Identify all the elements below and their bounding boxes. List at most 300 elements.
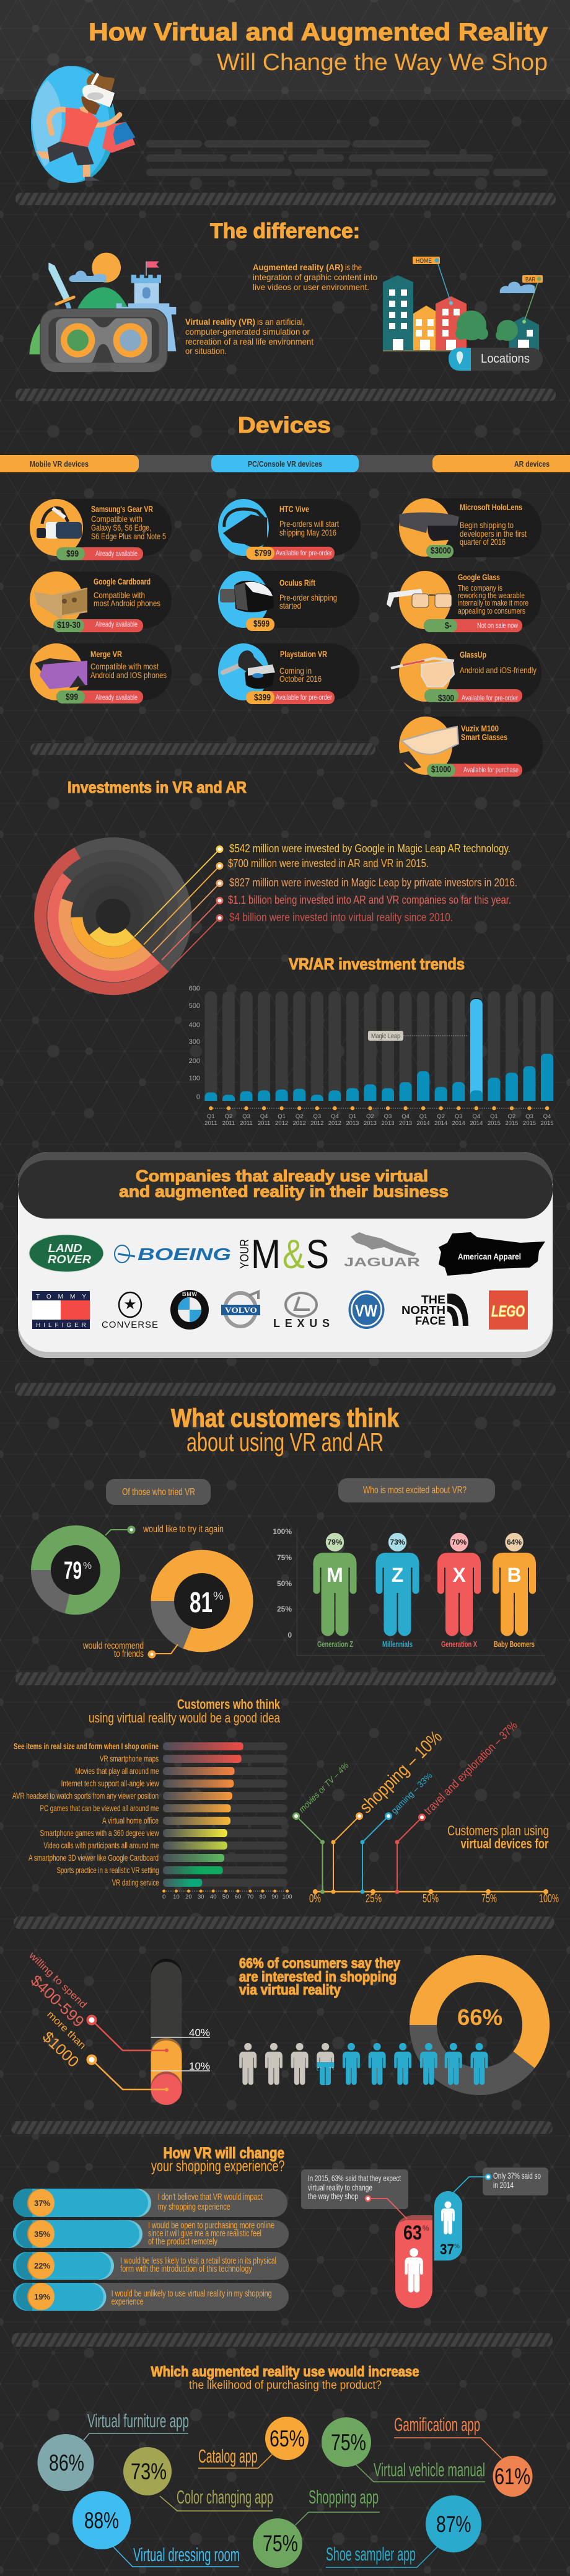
device card: Google Glass: reworking the wearable — [458, 591, 525, 600]
horizontal bar chart: good VR ideas: 80 — [260, 1894, 266, 1900]
horizontal bar chart: good VR ideas: VR dating service — [112, 1877, 159, 1887]
heading: what customers think — [171, 1403, 400, 1457]
bar chart: VR/AR investment trends: 2011 — [222, 1120, 235, 1127]
bubble: virtual furniture app: Virtual furniture app — [87, 2410, 189, 2432]
bar chart: VR/AR investment trends: 2014 — [452, 1120, 465, 1127]
figure: Generation X: Generation X — [441, 1639, 477, 1649]
heading: what customers think: about using VR and AR — [186, 1427, 384, 1457]
bar chart: VR/AR investment trends: Q3 — [313, 1113, 321, 1120]
device card: Playstation VR — [218, 643, 359, 704]
horizontal bar chart: good VR ideas: 40 — [210, 1894, 216, 1900]
thermometer chart: willingness to spend: 40% — [189, 2027, 210, 2039]
bar chart: VR/AR investment trends: Q1 — [278, 1113, 286, 1120]
lollipop chart: planned uses of virtual devices: 75% — [481, 1892, 497, 1905]
device card: Google Glass: internally to make it more — [458, 598, 528, 607]
callout: 2015: In 2015, 63% said that they expect — [308, 2173, 401, 2183]
bubble: gamification app: 61% — [494, 2464, 530, 2489]
illustration: city with location pins — [383, 257, 543, 371]
lollipop chart: planned uses of virtual devices: 100% — [539, 1892, 559, 1905]
heading: the difference: The difference: — [210, 219, 360, 243]
text: augmented reality definition: is the — [345, 262, 362, 272]
device card: Google Cardboard — [30, 571, 172, 632]
logo: The North Face — [401, 1294, 468, 1327]
bar chart: VR/AR investment trends: Q3 — [455, 1113, 463, 1120]
bar chart: VR/AR investment trends: Q3 — [242, 1113, 250, 1120]
horizontal bar chart: good VR ideas: AVR headset to watch sports from any viewer position — [12, 1791, 159, 1801]
donut chart: 79 percent would try again: would like to try it again — [142, 1524, 224, 1535]
bubble: color changing app — [123, 2447, 273, 2511]
heading: investment trends: VR/AR investment trends — [289, 955, 465, 973]
device card: Merge VR: Compatible with most — [90, 661, 159, 671]
device category tabs: Mobile VR devices — [30, 459, 89, 469]
redacted intro text bars — [146, 140, 548, 176]
logo: Tommy Hilfiger — [32, 1291, 90, 1329]
callout: 2015: virtual reality to change — [308, 2182, 372, 2192]
stem: shopping: shopping – 10% — [356, 1727, 446, 1817]
device card: HTC Vive: Available for pre-order — [276, 549, 332, 557]
device card: Samsung Gear VR: Samsung's Gear VR — [91, 504, 153, 514]
device card: HTC Vive — [218, 499, 361, 560]
title: Will Change the Way We Shop — [217, 50, 548, 76]
logo: Converse: ★ — [123, 1295, 137, 1313]
radial investment chart — [35, 837, 192, 995]
lollipop chart: planned uses of virtual devices — [294, 1719, 559, 1905]
device card: Playstation VR: Playstation VR — [280, 649, 327, 659]
lollipop chart: planned uses of virtual devices: 50% — [423, 1892, 439, 1905]
progress bars: how VR will change shopping: form with the introduction of this technology — [120, 2264, 252, 2274]
device card: HTC Vive: $799 — [255, 548, 271, 558]
heading: which AR use: the likelihood of purchasing the product? — [189, 2379, 382, 2392]
device card: Google Cardboard: $19-30 — [57, 620, 81, 630]
device card: Merge VR — [30, 643, 172, 704]
device card: Microsoft HoloLens: developers in the first — [460, 529, 527, 539]
logo: BMW — [170, 1290, 209, 1330]
horizontal bar chart: good VR ideas: 70 — [247, 1894, 253, 1900]
donut chart: 81 percent would recommend: % — [213, 1590, 224, 1602]
bar chart: VR/AR investment trends: 2014 — [470, 1120, 483, 1127]
progress bars: how VR will change shopping: since it will give me a more realistic feel — [148, 2228, 261, 2239]
horizontal bar chart: good VR ideas: 0 — [162, 1894, 165, 1900]
logo: Tommy Hilfiger: HILFIGER — [36, 1322, 86, 1329]
pictogram chart: excitement by generation: 50% — [277, 1579, 292, 1588]
bar chart: VR/AR investment trends: Q1 — [419, 1113, 427, 1120]
donut chart: 79 percent would try again: 79 — [64, 1557, 82, 1584]
horizontal bar chart: good VR ideas: A smartphone 3D viewer like Google Cardboard — [28, 1853, 159, 1863]
bubble: virtual dressing room — [72, 2491, 240, 2567]
bubble: color changing app: 73% — [131, 2459, 167, 2484]
logo: Jaguar — [344, 1232, 421, 1269]
bubble: shopping app: 75% — [263, 2531, 298, 2556]
donut chart: 81 percent would recommend: would recommend — [82, 1641, 144, 1651]
text: virtual reality definition: recreation of a real life environment — [185, 337, 314, 346]
bar chart: VR/AR investment trends: Q2 — [366, 1113, 374, 1120]
bar chart: VR/AR investment trends: Q1 — [490, 1113, 498, 1120]
text: augmented reality definition: live videos or user environment. — [253, 282, 369, 292]
title: How Virtual and Augmented Reality — [89, 19, 548, 46]
logo: Your M&amp;S: YOUR — [239, 1239, 252, 1269]
bubble: catalog app — [198, 2417, 309, 2468]
horizontal bar chart: good VR ideas: Movies that play all around me — [76, 1766, 159, 1776]
logo: Your M&amp;S: S — [306, 1231, 329, 1277]
device category tabs: AR devices — [514, 459, 550, 469]
stem: gaming — [361, 1770, 434, 1894]
bubble: virtual furniture app: 86% — [49, 2450, 84, 2476]
logo: Volkswagen — [348, 1290, 384, 1329]
thermometer chart: willingness to spend — [26, 1950, 210, 2105]
device card: Samsung Gear VR: Compatible with — [91, 514, 142, 524]
figure: Generation X: X — [452, 1564, 466, 1586]
bar chart: VR/AR investment trends: 2014 — [417, 1120, 430, 1127]
device card: HTC Vive: shipping May 2016 — [279, 527, 336, 537]
bubble: virtual furniture app — [37, 2410, 189, 2491]
thermometer chart: willingness to spend: more than — [45, 2009, 88, 2051]
donut chart: 66 percent: 66% — [457, 2005, 502, 2030]
device card: Oculus Rift: Pre-order shipping — [279, 593, 337, 602]
bar chart: VR/AR investment trends: Magic Leap — [371, 1033, 400, 1040]
comparison: 63 percent vs 37 percent — [301, 2168, 548, 2308]
bar chart: VR/AR investment trends: Q2 — [225, 1113, 232, 1120]
bar chart: VR/AR investment trends: 600 — [189, 985, 200, 992]
illustration: shopper wearing VR headset — [31, 66, 135, 183]
text: virtual reality definition — [185, 317, 314, 356]
heading: which AR use: Which augmented reality use would increase — [151, 2363, 419, 2380]
heading: 66 percent of consumers: are interested in shopping — [239, 1969, 397, 1985]
text: virtual reality definition: computer-generated simulation or — [185, 327, 310, 337]
thermometer chart: willingness to spend: willing to spend — [26, 1950, 89, 2011]
bar chart: VR/AR investment trends: 300 — [189, 1038, 200, 1046]
figure: Generation Z: M — [327, 1564, 343, 1586]
bar chart: VR/AR investment trends: Q1 — [207, 1113, 215, 1120]
bar chart: VR/AR investment trends: Q4 — [260, 1113, 268, 1120]
logo: Lego — [489, 1290, 528, 1330]
progress bars: how VR will change shopping: 22% — [34, 2261, 50, 2270]
heading: customers who think: using virtual reality would be a good idea — [89, 1710, 281, 1726]
logo: Volkswagen: VW — [355, 1301, 377, 1320]
horizontal bar chart: good VR ideas: A virtual home office — [102, 1815, 159, 1825]
figure: Baby Boomers — [493, 1533, 536, 1649]
investment facts with leader lines: $4 billion were invested into virtual reality since 2010. — [229, 911, 453, 924]
bar chart: VR/AR investment trends: 2015 — [505, 1120, 518, 1127]
device card: Google Cardboard: Google Cardboard — [94, 576, 151, 586]
panel heading: and augmented reality in their business — [119, 1182, 449, 1201]
donut chart: 79 percent would try again — [41, 1524, 224, 1605]
bubble: virtual dressing room: 88% — [84, 2508, 119, 2533]
horizontal bar chart: good VR ideas: 100 — [283, 1894, 292, 1900]
text: augmented reality definition: integration of graphic content into — [253, 272, 377, 282]
device card: Google Glass: Google Glass — [458, 572, 500, 582]
pill: 63 percent — [395, 2215, 432, 2308]
stem: travel and exploration: travel and exploration – 37% — [422, 1719, 520, 1818]
device card: Merge VR: $99 — [66, 692, 78, 702]
device card: Google Glass: Not on sale now — [477, 621, 518, 630]
device card: Microsoft HoloLens: Microsoft HoloLens — [460, 502, 522, 512]
callout: 2014: Only 37% said so — [493, 2171, 541, 2181]
bar chart: VR/AR investment trends: 2013 — [364, 1120, 377, 1127]
progress bars: how VR will change shopping: 37% — [34, 2199, 50, 2208]
bar chart: VR/AR investment trends: 400 — [189, 1021, 200, 1029]
figure: Generation Z — [314, 1533, 357, 1649]
horizontal bar chart: good VR ideas: See items in real size and form when I shop online — [14, 1741, 159, 1751]
title — [89, 19, 548, 76]
panel heading: Companies that already use virtual — [136, 1167, 428, 1185]
thermometer chart: willingness to spend: $400-599 — [27, 1972, 87, 2031]
horizontal bar chart: good VR ideas: 90 — [271, 1894, 278, 1900]
device card: Vuzix M100 Smart Glasses: Vuzix M100 — [461, 723, 499, 733]
logo: Land Rover — [29, 1235, 103, 1272]
device card: Oculus Rift: $599 — [253, 619, 270, 629]
device card: Vuzix M100 Smart Glasses: Available for purchase — [463, 765, 519, 774]
bar chart: VR/AR investment trends — [189, 985, 554, 1127]
horizontal bar chart: good VR ideas: Internet tech support all-angle view — [61, 1778, 159, 1788]
device category tabs: PC/Console VR devices — [248, 459, 322, 469]
progress bars: how VR will change shopping: experience — [112, 2296, 144, 2307]
heading: investments: Investments in VR and AR — [68, 778, 247, 796]
figure: Baby Boomers: Baby Boomers — [494, 1639, 535, 1649]
figure: Baby Boomers: B — [507, 1564, 522, 1586]
device card: Google Glass — [387, 571, 541, 632]
donut chart: 79 percent would try again: % — [83, 1561, 92, 1571]
device card: Microsoft HoloLens — [399, 498, 542, 558]
bubble: catalog app: 65% — [270, 2426, 305, 2451]
bubble: shoe sampler app — [326, 2495, 481, 2567]
device card: HTC Vive: HTC Vive — [279, 504, 309, 514]
pill: 37 percent — [434, 2191, 462, 2261]
bar chart: VR/AR investment trends: 2012 — [310, 1120, 323, 1127]
device card: GlassUp: $300 — [438, 693, 454, 704]
logo: Converse — [102, 1292, 158, 1330]
device card: Merge VR: Already available — [95, 693, 138, 702]
lollipop chart: planned uses of virtual devices: 0% — [309, 1892, 321, 1905]
pictogram chart: excitement by generation: 75% — [277, 1553, 292, 1562]
figure: Millennials: Millennials — [382, 1639, 413, 1649]
logo: Jaguar: JAGUAR — [344, 1256, 421, 1269]
text: augmented reality definition — [253, 262, 377, 292]
lollipop chart: planned uses of virtual devices: 25% — [366, 1892, 382, 1905]
logo: Boeing: BOEING — [138, 1245, 231, 1264]
bar chart: VR/AR investment trends: 2011 — [240, 1120, 253, 1127]
callout: 2014 — [483, 2168, 548, 2195]
device card: Samsung Gear VR: S6 Edge Plus and Note 5 — [91, 531, 166, 541]
horizontal bar chart: good VR ideas: 10 — [173, 1894, 180, 1900]
text: virtual reality definition: is an artificial, — [257, 317, 305, 327]
device card: Vuzix M100 Smart Glasses: $1000 — [431, 764, 451, 775]
logo: Lexus: LEXUS — [273, 1317, 330, 1330]
bubble: catalog app: Catalog app — [198, 2445, 258, 2467]
device card: HTC Vive: Pre-orders will start — [279, 519, 339, 529]
logo: Land Rover: LAND — [48, 1242, 82, 1255]
bar chart: VR/AR investment trends: 500 — [189, 1002, 200, 1010]
progress bars: how VR will change shopping: I don't believe that VR would impact — [158, 2192, 263, 2202]
heading: which AR use — [151, 2363, 419, 2392]
progress bars: how VR will change shopping: my shopping experience — [158, 2202, 230, 2212]
investment facts with leader lines: $700 million were invested in AR and VR in 2015. — [228, 857, 429, 870]
investment facts with leader lines: $827 million were invested in Magic Leap by private investors in 2016. — [229, 876, 517, 889]
device card: Samsung Gear VR: Already available — [95, 549, 138, 558]
horizontal bar chart: good VR ideas: Sports practice in a realistic VR setting — [57, 1865, 159, 1875]
donut chart: 81 percent would recommend: to friends — [114, 1649, 144, 1659]
horizontal bar chart: good VR ideas: PC games that can be viewed all around me — [40, 1803, 159, 1813]
bubble: virtual vehicle manual — [322, 2417, 485, 2482]
label: who is most excited: Who is most excited about VR? — [363, 1485, 467, 1496]
pill: 37 percent: 37 — [440, 2241, 454, 2258]
bubble: virtual vehicle manual: 75% — [331, 2430, 366, 2455]
bar chart: VR/AR investment trends: 2013 — [399, 1120, 412, 1127]
progress bars: how VR will change shopping: I would be unlikely to use virtual reality in my shopping — [112, 2288, 272, 2299]
progress bars: how VR will change shopping: 19% — [34, 2292, 50, 2301]
device card: Oculus Rift — [218, 571, 359, 631]
logo: American Apparel: American Apparel — [458, 1251, 521, 1261]
logo: Land Rover: ROVER — [48, 1253, 91, 1266]
figure: Generation X: 70% — [452, 1538, 467, 1546]
bar chart: VR/AR investment trends: Q3 — [525, 1113, 533, 1120]
device card: Microsoft HoloLens: Begin shipping to — [460, 520, 514, 530]
logo: Converse: CONVERSE — [102, 1320, 158, 1330]
pill: 63 percent: 63 — [403, 2221, 422, 2244]
logo: Your M&amp;S: & — [283, 1231, 305, 1277]
stem: movies or TV: movies or TV – 4% — [297, 1760, 351, 1814]
donut chart: 66 percent — [423, 1969, 536, 2081]
bar chart: VR/AR investment trends: 2015 — [523, 1120, 536, 1127]
bubble: shopping app: Shopping app — [309, 2486, 379, 2508]
bar chart: VR/AR investment trends: 0 — [196, 1093, 200, 1101]
bar chart: VR/AR investment trends: 2013 — [381, 1120, 395, 1127]
device card: Google Cardboard: Already available — [95, 620, 138, 629]
bubble: shopping app — [253, 2486, 380, 2568]
callout: 2014: in 2014 — [493, 2180, 514, 2190]
investment facts with leader lines: $542 million were invested by Google in Magic Leap AR technology. — [229, 842, 511, 855]
caption — [447, 1823, 549, 1851]
logo: The North Face: THE — [421, 1294, 445, 1306]
logo: Your M&amp;S — [239, 1231, 329, 1277]
bar chart: VR/AR investment trends: 100 — [189, 1075, 200, 1082]
text: virtual reality definition: Virtual reality (VR) — [185, 317, 255, 327]
figure: Millennials: 73% — [390, 1538, 405, 1546]
text: virtual reality definition: or situation. — [185, 346, 227, 356]
bar chart: VR/AR investment trends: 2012 — [293, 1120, 306, 1127]
figure: Generation X — [437, 1533, 481, 1649]
bar chart: VR/AR investment trends: 2015 — [540, 1120, 554, 1127]
device card: Samsung Gear VR — [30, 499, 172, 560]
horizontal bar chart: good VR ideas: 60 — [235, 1894, 241, 1900]
device card: GlassUp: Android and iOS-friendly — [460, 665, 537, 675]
device card: Playstation VR: October 2016 — [279, 674, 322, 684]
bar chart: VR/AR investment trends: 2013 — [346, 1120, 359, 1127]
callout: 2015: the way they shop — [308, 2191, 358, 2201]
bar chart: VR/AR investment trends: 200 — [189, 1057, 200, 1065]
illustration: city with location pins: Locations — [481, 352, 530, 366]
bar chart: VR/AR investment trends: 2012 — [275, 1120, 288, 1127]
logo: The North Face: NORTH — [401, 1304, 445, 1317]
heading: customers who think: Customers who think — [177, 1696, 281, 1712]
investment facts with leader lines: $1.1 billion being invested into AR and VR companies so far this year. — [228, 894, 511, 906]
illustration: VR goggles with fantasy scene — [29, 253, 176, 372]
thermometer chart: willingness to spend: $1000 — [39, 2028, 82, 2071]
heading: 66 percent of consumers — [239, 1955, 400, 1998]
label: who is most excited — [338, 1478, 495, 1502]
thermometer chart: willingness to spend: 10% — [189, 2060, 210, 2072]
horizontal bar chart: good VR ideas: VR smartphone maps — [100, 1753, 159, 1763]
heading: 66 percent of consumers: via virtual reality — [239, 1982, 341, 1998]
bubble: gamification app — [394, 2414, 533, 2497]
logo: Your M&amp;S: M — [251, 1231, 281, 1277]
heading: 66 percent of consumers: 66% of consumers say they — [239, 1955, 400, 1971]
bar chart: VR/AR investment trends: 2015 — [488, 1120, 501, 1127]
panel: companies using VR and AR — [18, 1152, 553, 1358]
horizontal bar chart: good VR ideas: 50 — [222, 1894, 229, 1900]
horizontal bar chart: good VR ideas: 20 — [185, 1894, 192, 1900]
pictogram chart: excitement by generation: 25% — [277, 1605, 292, 1613]
device card: Playstation VR: $399 — [254, 692, 271, 703]
bar chart: VR/AR investment trends: Q3 — [384, 1113, 392, 1120]
bar chart: VR/AR investment trends: Q2 — [296, 1113, 304, 1120]
investment facts with leader lines — [134, 842, 517, 968]
bubble: shoe sampler app: Shoe sampler app — [326, 2543, 416, 2565]
pictogram row: ten people — [239, 2043, 488, 2085]
device card: Merge VR: Merge VR — [90, 649, 122, 659]
figure: Millennials: Z — [392, 1564, 403, 1586]
heading: customers who think — [89, 1696, 281, 1726]
heading: how VR will change: How VR will change — [164, 2145, 284, 2162]
progress bars: how VR will change shopping: I would be open to purchasing more online — [148, 2220, 274, 2231]
logo: Lego: LEGO — [491, 1303, 525, 1320]
bar chart: VR/AR investment trends: 2011 — [204, 1120, 217, 1127]
device card: Playstation VR: Available for pre-order — [276, 693, 332, 702]
figure: Millennials — [375, 1533, 419, 1649]
bar chart: VR/AR investment trends: Q4 — [543, 1113, 551, 1120]
bar chart: VR/AR investment trends: Q4 — [331, 1113, 339, 1120]
device card: Samsung Gear VR: Galaxy S6, S6 Edge, — [91, 523, 151, 532]
logo: Volvo — [221, 1292, 260, 1326]
bar chart: VR/AR investment trends: 2011 — [258, 1120, 270, 1127]
illustration: city with location pins: BAR — [525, 276, 535, 283]
callout: 2015 — [301, 2169, 408, 2209]
horizontal bar chart: good VR ideas — [12, 1741, 292, 1900]
device card: GlassUp: Available for pre-order — [462, 694, 518, 702]
device category tabs — [0, 455, 570, 472]
pictogram chart: excitement by generation: 0 — [287, 1631, 292, 1639]
device card: Google Cardboard: Compatible with — [94, 590, 145, 600]
logo: Volvo: VOLVO — [225, 1305, 257, 1315]
logo: American Apparel — [439, 1232, 545, 1276]
device card: Samsung Gear VR: $99 — [66, 549, 79, 559]
figure: Baby Boomers: 64% — [507, 1538, 522, 1546]
bubble: shoe sampler app: 87% — [436, 2512, 471, 2537]
logo: Tommy Hilfiger: TOMMY — [36, 1294, 86, 1300]
device card: Oculus Rift: Oculus Rift — [279, 578, 315, 588]
bar chart: VR/AR investment trends: Q2 — [508, 1113, 515, 1120]
device card: Google Glass: The company is — [458, 583, 502, 593]
pictogram chart: excitement by generation: 100% — [273, 1527, 292, 1536]
device card: Google Glass: $- — [445, 620, 452, 631]
device card: Vuzix M100 Smart Glasses — [393, 717, 543, 777]
progress bars: how VR will change shopping — [13, 2189, 289, 2311]
figure: Generation Z: 79% — [327, 1538, 343, 1546]
stem: movies or TV — [294, 1760, 351, 1894]
heading: how VR will change: your shopping experience? — [151, 2158, 285, 2175]
device card: Microsoft HoloLens: quarter of 2016 — [460, 537, 506, 547]
bubble: virtual vehicle manual: Virtual vehicle manual — [374, 2459, 485, 2481]
pictogram chart: excitement by generation — [273, 1527, 545, 1656]
logo: Boeing — [115, 1245, 231, 1264]
bar chart: VR/AR investment trends: 2014 — [434, 1120, 447, 1127]
label: of those who tried VR — [106, 1479, 211, 1505]
bar chart: VR/AR investment trends: Q4 — [401, 1113, 410, 1120]
bar chart: VR/AR investment trends: Q2 — [437, 1113, 445, 1120]
heading: how VR will change — [151, 2145, 285, 2175]
donut chart: 81 percent would recommend — [82, 1562, 242, 1659]
device card: Microsoft HoloLens: $3000 — [431, 545, 451, 556]
stem: gaming: gaming – 33% — [389, 1770, 434, 1815]
